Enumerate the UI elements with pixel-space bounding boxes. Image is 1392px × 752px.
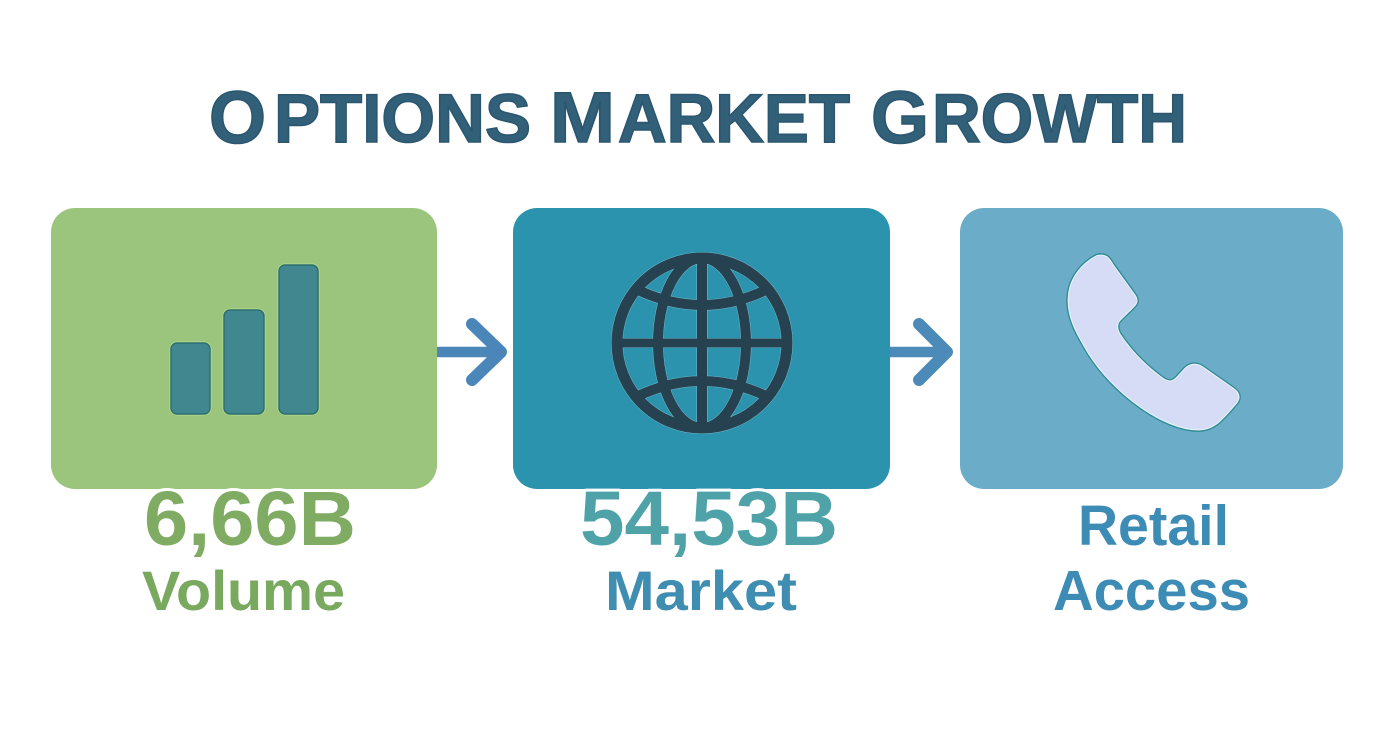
icon: telephone handset (1068, 255, 1239, 430)
value: 6,66B: 6,66B (144, 476, 356, 562)
market card background (513, 208, 890, 489)
arrow: market to retail access (890, 324, 947, 380)
stat: 6,66B volume (142, 476, 356, 622)
title: ARKET (618, 80, 850, 157)
volume card background (51, 208, 437, 489)
title: G (871, 76, 929, 159)
stat: 54,53B market (580, 476, 838, 622)
icon: globe (617, 258, 787, 428)
label: retail access (1053, 494, 1250, 623)
label line: Access: Access (1053, 559, 1250, 623)
label line: Retail: Retail (1078, 494, 1229, 558)
title: PTIONS (274, 80, 531, 157)
arrow: volume to market (437, 324, 501, 380)
label: Market: Market (605, 559, 797, 622)
title: ROWTH (932, 80, 1187, 157)
retail access card background (960, 208, 1343, 489)
title: O (209, 76, 266, 159)
panel: volume (51, 208, 437, 489)
title: M (550, 79, 615, 158)
icon: bar chart (171, 265, 318, 414)
value: 54,53B: 54,53B (580, 476, 838, 562)
panel: retail access (960, 208, 1343, 489)
panel: market (513, 208, 890, 489)
label: Volume: Volume (142, 559, 345, 622)
